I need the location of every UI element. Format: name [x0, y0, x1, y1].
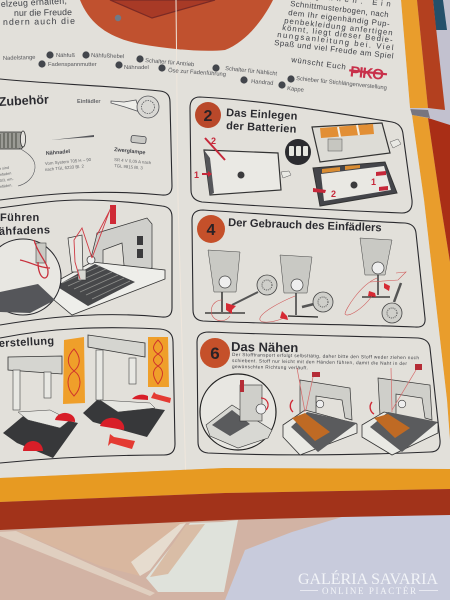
- parts legend: Handrad: [251, 79, 274, 87]
- body text: Der Stofftransport erfolgt selbsttätig, daher bitte den Stoff weder ziehen noch: [232, 352, 419, 360]
- icon: thread spool: 0/3, em-: [0, 177, 15, 183]
- parts legend: Schalter für Antrieb: [145, 58, 194, 68]
- illustration: threader step 1: [205, 250, 277, 321]
- icon: needle: [51, 135, 94, 140]
- parts legend: Nähfußhebel: [91, 53, 124, 60]
- label: Zwerglampe: SR 4 V 0,05 A nach: [114, 157, 152, 165]
- illustration: machine sewing right: [362, 364, 438, 455]
- illustration: sewing machine: [48, 205, 165, 315]
- parts legend: Nähfuß: [56, 53, 75, 59]
- intro text right: Spaß und viel Freude am Spiel: [274, 38, 394, 61]
- illustration: right machine head: [83, 335, 165, 437]
- panel: Zubehör: [0, 79, 172, 200]
- heading: Der Gebrauch des Einfädlers: [228, 217, 382, 234]
- parts legend: Kappe: [287, 86, 304, 94]
- panel: 6 Das Nähen: [197, 332, 440, 455]
- label: Nähnadel: Vom System 705 H – 90: [45, 157, 92, 166]
- game board: [110, 0, 215, 18]
- lower sheet: right edge strips: [412, 115, 450, 440]
- arrow: slider upper: [151, 392, 171, 403]
- stitch swatch right: [148, 337, 169, 387]
- illustration: battery case lid: 1: [194, 170, 199, 180]
- paper body: [0, 0, 450, 478]
- number badge: [195, 102, 221, 128]
- watermark: GALÉRIA SAVARIA: [298, 569, 438, 588]
- intro text left: ndern auch die: [3, 16, 75, 27]
- label: Nähnadel: Nähnadel: [46, 149, 71, 157]
- vertical fold line: [176, 0, 187, 520]
- icon: threader: [111, 96, 159, 118]
- number badge: [197, 215, 225, 243]
- watermark: ONLINE PIACTÉR: [322, 586, 416, 596]
- body text: gewünschten Richtung verläuft.: [232, 364, 308, 370]
- folded paper corner: [0, 520, 238, 596]
- heading: ähfadens: [0, 224, 51, 238]
- label: Zwerglampe: TGL 9815 Bl. 3: [114, 163, 144, 171]
- intro text left: [1, 0, 75, 27]
- panel: 4 Der Gebrauch des Einfädlers: [192, 210, 425, 327]
- body text: schiebent. Stoff nur leicht mit den Händen führen, damit die Naht in der: [232, 358, 407, 366]
- illustration: open battery case: [312, 123, 401, 162]
- illustration: threader step 3: [345, 238, 406, 323]
- label: Zwerglampe: Zwerglampe: [114, 147, 146, 156]
- parts legend: Schalter für Nählicht: [225, 66, 278, 77]
- intro text right: nungsanleitung bei. Viel: [277, 30, 394, 52]
- inset: handwheel: [200, 374, 276, 450]
- illustration: threader step 2: [260, 255, 333, 322]
- arrow labels: 2: [331, 189, 336, 199]
- panel: 2 Das Einlegen der Batterien: [190, 97, 412, 213]
- heading: erstellung: [0, 335, 55, 350]
- number badge: 4: [207, 222, 216, 239]
- label: Einfädler: Einfädler: [77, 99, 101, 105]
- panel: Führen des Nähfadens: [0, 200, 172, 325]
- icon: battery symbol: [285, 139, 311, 165]
- parts legend: Schieber für Stichlängenverstellung: [296, 76, 387, 92]
- arrow labels: [313, 171, 388, 199]
- parts legend: [3, 51, 387, 94]
- heading: Führen: [0, 212, 40, 224]
- bottom orange band: [0, 468, 450, 502]
- heading: Das Nähen: [231, 339, 298, 355]
- intro text right: [274, 0, 394, 72]
- parts legend: Öse zur Fadenführung: [168, 67, 226, 78]
- arrow: slider lower: [108, 434, 135, 449]
- illustration: closing battery case: [313, 162, 397, 206]
- number badge: 6: [210, 344, 220, 363]
- intro text left: nur die Freude: [14, 7, 72, 18]
- label: Nähnadel: nach TGL 6233 Bl. 2: [45, 164, 85, 172]
- inset: threading detail: [0, 239, 61, 315]
- intro text right: könnt, liegt dieser Bedie-: [282, 23, 393, 45]
- arrow labels: 1: [371, 177, 376, 187]
- panel: Stichlängenverstellung: [0, 328, 175, 463]
- watermark: [298, 569, 438, 596]
- upper sheet: orange and red edge strips: [401, 0, 445, 110]
- PIKO logo: PIKO: [349, 63, 385, 84]
- illustration: battery case lid: [194, 136, 291, 195]
- bottom red band: [0, 489, 450, 530]
- parts legend: Nähnadel: [124, 65, 149, 71]
- heading: [0, 212, 51, 238]
- heading: Das Einlegen: [226, 107, 298, 123]
- body text: [232, 352, 419, 370]
- parts legend: Nadelstange: [3, 55, 36, 62]
- illustration: left machine head: [3, 356, 78, 458]
- part number 7: [115, 15, 121, 21]
- intro text right: dem Ihr eigenhändig Pup-: [288, 8, 391, 29]
- parts legend: Fadenspannmutter: [48, 62, 97, 68]
- label: Nähnadel: [45, 149, 92, 172]
- number badge: 2: [204, 108, 213, 125]
- stitch swatch left: [63, 337, 85, 404]
- heading: [226, 107, 298, 136]
- illustration: battery case lid: 2: [211, 136, 216, 146]
- label: Zwerglampe: [114, 147, 152, 171]
- icon: thread spool: [0, 131, 35, 189]
- illustration: machine sewing left: [283, 368, 357, 455]
- heading: der Batterien: [226, 120, 297, 136]
- number badge: [200, 338, 230, 368]
- icon: miniature lamp: [131, 135, 146, 144]
- intro text right: penbekleidung anfertigen: [284, 16, 393, 37]
- red blob illustration at top: [80, 0, 273, 51]
- intro text right: wünscht Euch: [290, 55, 346, 72]
